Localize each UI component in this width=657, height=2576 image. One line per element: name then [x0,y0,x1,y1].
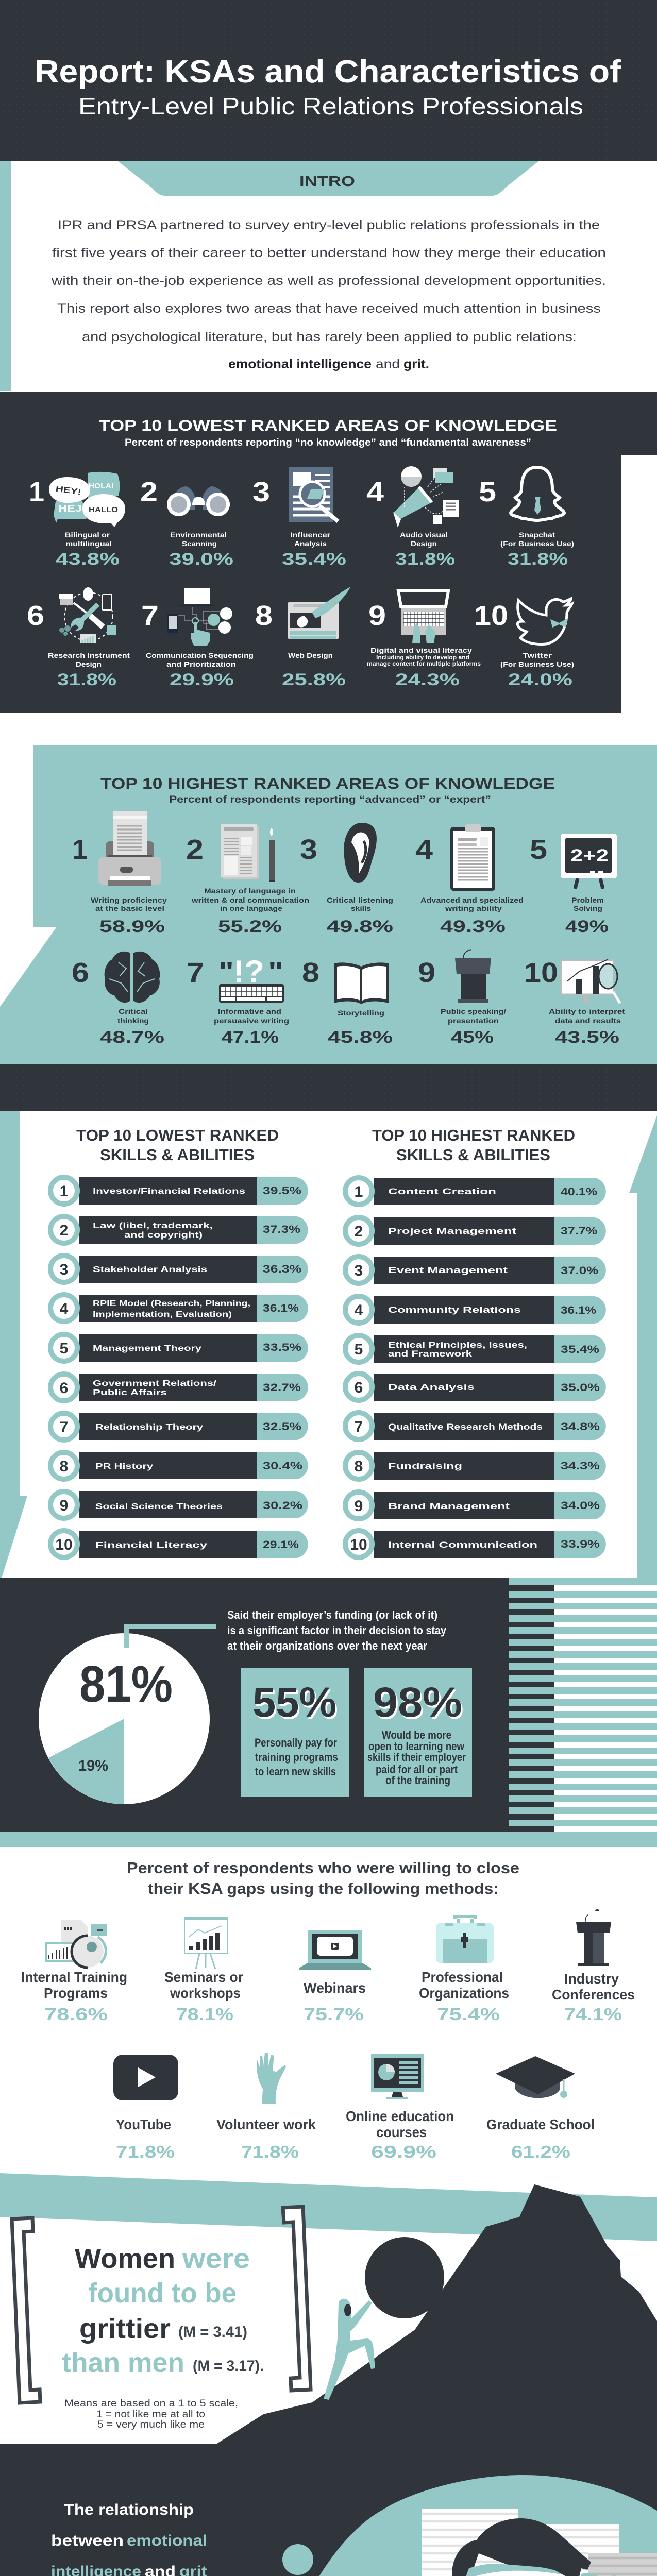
item labels: Solving [574,904,602,912]
right list bars: 7 [355,1418,363,1435]
icon: brain [105,952,160,1003]
item labels: skills [351,904,371,912]
icon: snapchat ghost [511,467,564,520]
item labels: Including ability to develop and [376,655,469,661]
left list bars: Stakeholder Analysis [93,1265,207,1274]
panel: highest ranked knowledge [0,745,657,1064]
illustration: man at desk [420,2518,654,2576]
percentages: 49.8% [327,917,393,936]
percentages: 45% [451,1028,494,1046]
icon: woman pushing boulder [324,2299,375,2400]
intro paragraph: grit. [403,357,429,371]
icon: podium [576,1909,611,1966]
funding text: is a significant factor in their decision to stay [227,1624,447,1637]
right list bars: Fundraising [388,1461,462,1471]
icon: keyboard with quote: !? [233,954,264,989]
left list bars: 9 [60,1497,68,1514]
rank numbers: 2 [186,834,204,865]
panel: skills and abilities [0,1111,657,1578]
grit statement: Women [75,2243,175,2274]
icon: binoculars [167,486,230,516]
right list bars: 4 [355,1302,363,1319]
intro paragraph: and psychological literature, but has rarely been applied to public relations: [82,330,577,344]
right list bars: 35.4% [561,1344,599,1355]
head eye shape [282,2544,313,2575]
item labels: Storytelling [338,1009,384,1017]
right list bars: Ethical Principles, Issues, [388,1340,527,1350]
icon: keyboard with quote: " [268,956,283,988]
right list bars: 5 [355,1341,363,1358]
panel: lowest ranked knowledge [0,392,657,713]
right list bars: 10 [350,1536,367,1553]
left list bars: Management Theory [93,1344,201,1353]
rank numbers: 4 [366,477,384,507]
right list bars: 1 [355,1183,363,1200]
right list bars: 2 [355,1223,363,1240]
right list bars: 34.8% [561,1421,600,1433]
percentages [56,550,572,689]
stat card: 98 percent: open to learning new [368,1740,465,1753]
right list bars: 33.9% [561,1538,600,1550]
left list bars: 30.2% [263,1500,302,1512]
icon: ear [344,823,377,883]
left list bars: 30.4% [263,1460,302,1472]
item labels: Problem [571,896,604,904]
icon: speech bubbles: HALLO [89,505,118,514]
left list bars: 1 [60,1183,68,1200]
percentages: 25.8% [282,670,346,689]
stat card: 98 percent: 98% [375,1681,464,1728]
item labels: Audio visual [400,531,448,539]
diagonal band [0,2173,657,2241]
icon: briefcase [436,1917,494,1963]
rank numbers: 4 [415,834,433,865]
pie chart: 81 percent: 81% [79,1655,173,1713]
item labels: writing ability [445,904,502,912]
left list bars: 29.1% [263,1539,299,1551]
percentages: 31.8% [57,670,116,689]
grit statement: (M = 3.17). [193,2358,264,2375]
rank numbers: 1 [29,477,44,507]
left list bars: 2 [60,1222,68,1239]
icon: newspaper and pen [221,824,275,882]
intro paragraph: This report also explores two areas that have received much attention in business [57,301,601,316]
item labels: Advanced and specialized [420,896,524,904]
item labels: Bilingual or [65,531,110,539]
icon: laptop webinar [299,1930,371,1970]
rank numbers [72,834,558,988]
header banner [0,0,657,161]
intro paragraph: with their on-the-job experience as well as professional development opportunities. [51,274,606,288]
method percentages: 61.2% [511,2142,570,2161]
left list bars: 7 [60,1419,68,1436]
correlation statement: between [51,2532,124,2549]
intro paragraph [51,218,606,371]
scale note [64,2398,238,2430]
item labels: thinking [117,1016,149,1025]
right list bars: 37.0% [561,1265,598,1277]
item labels: Web Design [288,651,333,659]
item labels: presentation [448,1016,499,1025]
icon: boulder [365,2237,444,2318]
percentages: 45.8% [328,1028,393,1046]
icon: megaphone [393,466,459,528]
method labels: Industry [564,1971,619,1987]
percentages: 31.8% [395,550,455,568]
right list bars: 8 [355,1458,363,1475]
grit statement: grittier [79,2313,171,2344]
scale note: 5 = very much like me [97,2419,205,2430]
method percentages: 75.4% [437,2005,500,2024]
dotted band [0,1064,657,1111]
rank numbers: 5 [479,477,496,507]
right list bars: 34.3% [561,1460,600,1472]
item labels: Research Instrument [48,651,130,659]
item labels: written & oral communication [191,896,309,904]
method labels: Online education [346,2108,454,2124]
stat card: 98 percent: 98% [373,1679,462,1726]
right list bars: Brand Management [388,1501,510,1511]
right heading [372,1126,575,1164]
icon: laptop and hands [398,591,448,643]
rank numbers: 1 [72,834,88,865]
icon: document with magnifier [289,467,338,522]
left list bars: Public Affairs [93,1388,167,1397]
item labels: Critical [119,1007,148,1015]
item labels: Critical listening [327,896,393,904]
method percentages: 74.1% [564,2005,622,2024]
left list bars: Social Science Theories [95,1502,223,1511]
rank numbers: 6 [72,957,89,988]
item labels: Ability to interpret [549,1007,625,1015]
left list bars: 4 [60,1300,69,1317]
teal head silhouette [254,2475,657,2576]
method percentages [44,2005,622,2161]
rank numbers: 10 [474,600,508,631]
subheading: Percent of respondents reporting “advanced” or “expert” [169,794,491,805]
left list bars: 39.5% [263,1185,301,1197]
method percentages: 78.1% [176,2005,233,2024]
icon: speech bubbles: HEJ [58,503,82,514]
right list bars: Content Creation [388,1187,496,1196]
item labels: Twitter [523,651,552,659]
left bracket [12,2218,40,2403]
icon: open book [334,962,389,1004]
intro paragraph: emotional intelligence [228,357,372,371]
item labels: data and results [555,1016,621,1025]
right list bars: and Framework [388,1349,473,1359]
heading: their KSA gaps using the following methods: [148,1879,499,1897]
method percentages: 69.9% [371,2142,436,2161]
mountain [0,2184,657,2509]
intro heading: INTRO [299,173,355,189]
method labels: Programs [44,1985,108,2001]
icon: speech bubbles: HEY! [55,485,82,497]
item labels: Informative and [218,1007,281,1015]
icon: chart with magnifier [561,959,620,1003]
rank numbers: 3 [300,834,317,865]
item labels [48,531,574,668]
stat card: 55 percent: training programs [255,1751,338,1764]
percentages: 55.2% [218,917,282,936]
right list bars: 37.7% [561,1225,597,1237]
icon: graduation cap [496,2056,575,2098]
method percentages: 71.8% [116,2142,175,2161]
icon: speech bubbles [49,472,125,527]
item labels: at the basic level [95,904,164,912]
item labels: multilingual [65,539,112,548]
right heading: SKILLS & ABILITIES [396,1146,550,1164]
icon: training gears [45,1920,107,1968]
left list bars: Implementation, Evaluation) [93,1310,232,1319]
right list bars [345,1178,606,1558]
percentages: 29.9% [170,670,234,689]
rank numbers: 9 [418,957,435,988]
grit statement: than men [62,2347,184,2378]
method labels: Internal Training [21,1969,127,1985]
scale note: 1 = not like me at all to [96,2409,205,2420]
stat card: 98 percent: paid for all or part [376,1763,458,1776]
method percentages: 75.7% [304,2005,364,2024]
icon: keyboard with quote: " [218,956,234,988]
panel: emotional intelligence and grit [0,2444,657,2576]
intro paragraph: first five years of their career to better understand how they merge their education [52,246,606,260]
left list bars: 10 [55,1536,73,1553]
percentages: 35.4% [282,550,346,568]
rank numbers: 8 [302,957,319,988]
panel: intro [0,161,606,391]
rank numbers: 6 [27,600,44,631]
grit statement [62,2243,264,2378]
stat card: 98 percent: skills if their employer [367,1751,466,1764]
funding text: Said their employer’s funding (or lack of it) [227,1608,437,1621]
icon: browser with brush [288,587,350,639]
icon: flipchart [184,1917,227,1969]
left list bars: Financial Literacy [95,1541,207,1550]
right list bars: Internal Communication [388,1540,537,1550]
percentages: 49% [565,917,609,936]
rank numbers: 3 [252,477,270,507]
item labels: Environmental [170,531,227,539]
item labels: Scanning [182,539,217,548]
panel: closing KSA gaps [21,1859,635,2161]
method labels: Conferences [552,1987,635,2003]
item labels: Communication Sequencing [146,651,254,659]
method labels: Seminars or [164,1969,243,1985]
left list bars: 32.5% [263,1421,301,1433]
scale note: Means are based on a 1 to 5 scale, [64,2398,238,2409]
title: Report: KSAs and Characteristics of [35,54,621,90]
left list bars: Relationship Theory [95,1423,203,1432]
item labels: Writing proficiency [91,896,167,904]
right list bars: Qualitative Research Methods [388,1422,543,1432]
right list bars: Event Management [388,1265,508,1275]
correlation statement: emotional [127,2532,207,2549]
item labels: Design [411,539,437,548]
icon: chalkboard [561,834,617,889]
stat card: 98 percent [364,1668,472,1797]
stat card: 55 percent: Personally pay for [255,1736,337,1749]
rank numbers: 2 [140,477,158,507]
icon: twitter bird [517,599,572,644]
funding text [227,1608,447,1652]
percentages: 31.8% [508,550,568,568]
icon: youtube [113,2055,178,2100]
percentages: 24.3% [395,670,460,689]
left list bars: Government Relations/ [93,1379,217,1388]
percentages: 24.0% [508,670,572,689]
item labels: persuasive writing [214,1016,289,1025]
right list bars: 3 [355,1262,363,1279]
stat card: 55 percent: 55% [254,1681,338,1728]
method labels: Professional [422,1969,503,1985]
right list bars: 36.1% [561,1304,596,1316]
pie chart: 81 percent: 19% [78,1757,108,1774]
rank numbers: 5 [530,834,547,865]
icon: raised hand [257,2053,286,2104]
correlation statement: The relationship [64,2501,194,2518]
left list bars [50,1177,308,1558]
right list bars: Community Relations [388,1305,521,1315]
percentages [99,917,619,1046]
left list bars: Law (libel, trademark, [93,1222,213,1230]
icon: podium [455,950,491,1003]
funding text: at their organizations over the next year [227,1639,427,1652]
rank numbers: 9 [368,600,386,631]
item labels: Design [76,660,102,668]
percentages: 48.7% [100,1028,164,1046]
stat card: 98 percent: Would be more [382,1728,451,1741]
grit statement: were [182,2243,250,2274]
heading: TOP 10 LOWEST RANKED AREAS OF KNOWLEDGE [99,417,557,434]
heading: Percent of respondents who were willing to close [127,1859,519,1877]
item labels: and Prioritization [166,660,236,668]
left list bars: 3 [60,1261,68,1278]
item labels: Snapchat [519,531,555,539]
item labels: Public speaking/ [441,1007,506,1015]
method percentages: 78.6% [44,2005,108,2024]
rank numbers: 8 [255,600,273,631]
stat card: 55 percent: 55% [252,1679,336,1726]
right list bars: 40.1% [561,1186,597,1198]
left list bars: 37.3% [263,1224,300,1235]
percentages: 43.5% [555,1028,619,1046]
item labels: in one language [220,904,282,912]
item labels: Analysis [294,539,327,548]
grit statement: found to be [88,2278,237,2309]
heading [127,1859,519,1897]
right list bars: 35.0% [561,1382,600,1394]
panel: funding [0,1578,657,1847]
icon: keyboard with quote [218,954,284,1003]
percentages: 39.0% [169,550,233,568]
heading: TOP 10 HIGHEST RANKED AREAS OF KNOWLEDGE [100,775,555,792]
method labels: Graduate School [486,2116,595,2132]
percentages: 43.8% [56,550,120,568]
method labels: Organizations [419,1985,509,2001]
icon: monitor chart [371,2054,424,2099]
icon: tools [59,587,116,643]
icon: chalkboard: 2+2 [570,846,609,866]
panel: grit [0,2173,657,2509]
method labels: Webinars [304,1980,366,1996]
stat card: 98 percent: of the training [385,1774,450,1787]
method labels: Volunteer work [216,2116,316,2132]
item labels [91,887,625,1025]
left heading [76,1126,279,1164]
icon: speech bubbles: HOLA! [89,482,114,490]
rank numbers: 7 [141,600,159,631]
left list bars: Investor/Financial Relations [93,1187,245,1196]
icon: sequencing with hand [167,588,232,646]
percentages: 58.9% [99,917,165,936]
left list bars: 36.3% [263,1263,301,1275]
right list bars: Project Management [388,1226,517,1236]
rank numbers: 10 [524,957,558,988]
item labels: (For Business Use) [500,539,574,548]
grit statement: (M = 3.41) [178,2324,247,2341]
method percentages: 71.8% [241,2142,299,2161]
pie chart: 81 percent [39,1633,210,1804]
intro paragraph: IPR and PRSA partnered to survey entry-level public relations professionals in the [58,218,600,232]
item labels: Digital and visual literacy [370,646,472,654]
method labels: YouTube [116,2116,171,2132]
method labels [21,1969,635,2140]
right list bars: 6 [355,1379,363,1396]
icon: printer [98,811,161,886]
left heading: SKILLS & ABILITIES [100,1146,255,1164]
left list bars: 36.1% [263,1302,299,1314]
left list bars: RPIE Model (Research, Planning, [93,1299,250,1308]
item labels: (For Business Use) [500,660,574,668]
callout bracket [124,1624,216,1648]
method labels: workshops [170,1985,241,2001]
left list bars: 33.5% [263,1342,301,1353]
right list bars: 34.0% [561,1500,600,1512]
percentages: 49.3% [440,917,506,936]
left list bars: 5 [60,1340,68,1357]
intro tab [118,161,538,196]
method labels: courses [376,2124,427,2140]
right list bars: Data Analysis [388,1382,475,1392]
subtitle: Entry-Level Public Relations Professionals [78,93,583,120]
intro paragraph: and [376,357,400,371]
rank numbers: 7 [187,957,204,988]
left list bars: 6 [60,1380,68,1397]
right bracket [283,2207,311,2391]
left list bars: and copyright) [124,1231,203,1240]
item labels: Influencer [290,531,331,539]
rank numbers [27,477,508,631]
stat card: 55 percent: to learn new skills [255,1765,336,1778]
paper stacks [318,2509,657,2576]
left list bars: 32.7% [263,1382,301,1394]
icon: clipboard [450,824,495,891]
stat card: 55 percent [241,1668,349,1797]
left heading: TOP 10 LOWEST RANKED [76,1126,279,1144]
left list bars: 8 [60,1458,68,1475]
item labels: Mastery of language in [204,887,296,895]
subheading: Percent of respondents reporting “no knowledge” and “fundamental awareness” [125,437,531,448]
left list bars: PR History [95,1462,153,1471]
right list bars: 9 [355,1498,363,1515]
percentages: 47.1% [222,1028,279,1046]
correlation statement [42,2501,217,2576]
right heading: TOP 10 HIGHEST RANKED [372,1126,575,1144]
item labels: manage content for multiple platforms [367,661,481,667]
